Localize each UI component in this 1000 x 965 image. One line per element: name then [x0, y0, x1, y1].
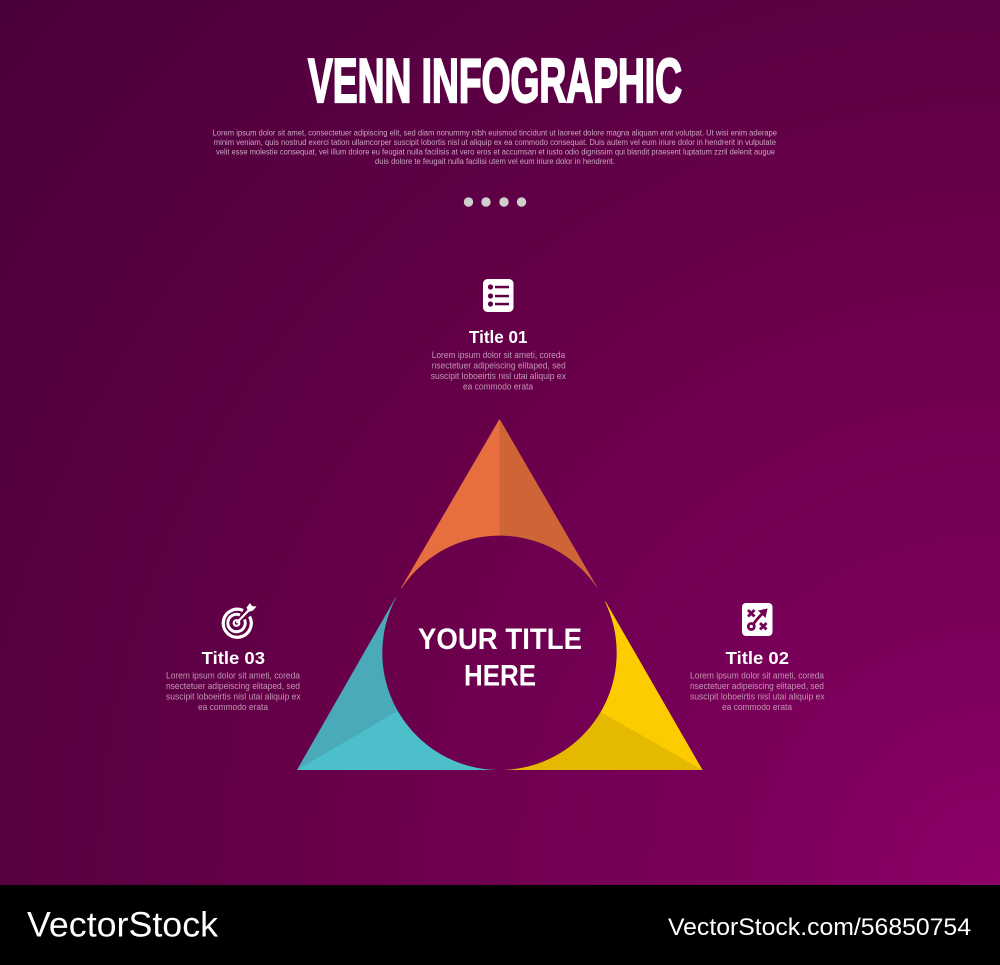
description: nsectetuer adipeiscing elitaped, sed: [166, 681, 300, 691]
panel: title 03: [166, 603, 301, 712]
description: suscipit loboeirtis nisl utai aliquip ex: [431, 371, 566, 381]
heading: Title 01: [469, 327, 528, 347]
description: ea commodo erata: [463, 382, 533, 392]
pagination dots: [464, 197, 526, 207]
footer bar: [0, 885, 1000, 965]
segment: yellow right: [500, 602, 702, 770]
description: suscipit loboeirtis nisl utai aliquip ex: [690, 692, 825, 702]
description: [431, 350, 566, 392]
segment: orange top: [401, 419, 597, 588]
intro paragraph: duis dolore te feugait nulla facilisi utem vel eum iriure dolor in hendrerit.: [375, 157, 615, 166]
description: Lorem ipsum dolor sit ameti, coreda: [690, 670, 824, 680]
description: suscipit loboeirtis nisl utai aliquip ex: [166, 692, 301, 702]
heading: Title 03: [202, 648, 265, 668]
description: [166, 670, 301, 712]
icon: target with dart: [223, 603, 256, 637]
panel: title 01: [431, 279, 566, 392]
description: nsectetuer adipeiscing elitaped, sed: [690, 681, 824, 691]
heading: Title 02: [726, 648, 789, 668]
center title: YOUR TITLE: [418, 623, 582, 656]
description: ea commodo erata: [198, 702, 268, 712]
description: Lorem ipsum dolor sit ameti, coreda: [432, 350, 565, 360]
venn triangle: [297, 419, 702, 770]
segment: blue left: [297, 597, 500, 770]
icon: strategy play: [742, 603, 772, 636]
panel: title 02: [690, 603, 825, 712]
title: VENN INFOGRAPHIC: [308, 47, 682, 116]
footer image id: VectorStock.com/56850754: [668, 914, 971, 941]
description: ea commodo erata: [722, 702, 792, 712]
center title: [418, 623, 582, 692]
intro paragraph: [213, 128, 778, 166]
footer logo: VectorStock: [27, 906, 219, 944]
description: [690, 670, 825, 712]
description: nsectetuer adipeiscing elitaped, sed: [432, 360, 566, 370]
icon: checklist: [483, 279, 514, 312]
description: Lorem ipsum dolor sit ameti, coreda: [166, 670, 300, 680]
center title: HERE: [464, 660, 536, 692]
intro paragraph: Lorem ipsum dolor sit amet, consectetuer adipiscing elit, sed diam nonummy nibh euismod tincidunt ut laoreet dolore magna aliquam erat volutpat. Ut wisi enim aderape: [213, 128, 778, 138]
intro paragraph: minim veniam, quis nostrud exerci tation ullamcorper suscipit lobortis nisl ut aliquip ex ea commodo consequat. Duis autem vel eum iriure dolor in hendrerit in vulputate: [214, 138, 777, 147]
intro paragraph: velit esse molestie consequat, vel illum dolore eu feugiat nulla facilisis at vero eros et accumsan et iusto odio dignissim qui blandit praesent luptatum zzril delenit augue: [216, 148, 776, 156]
